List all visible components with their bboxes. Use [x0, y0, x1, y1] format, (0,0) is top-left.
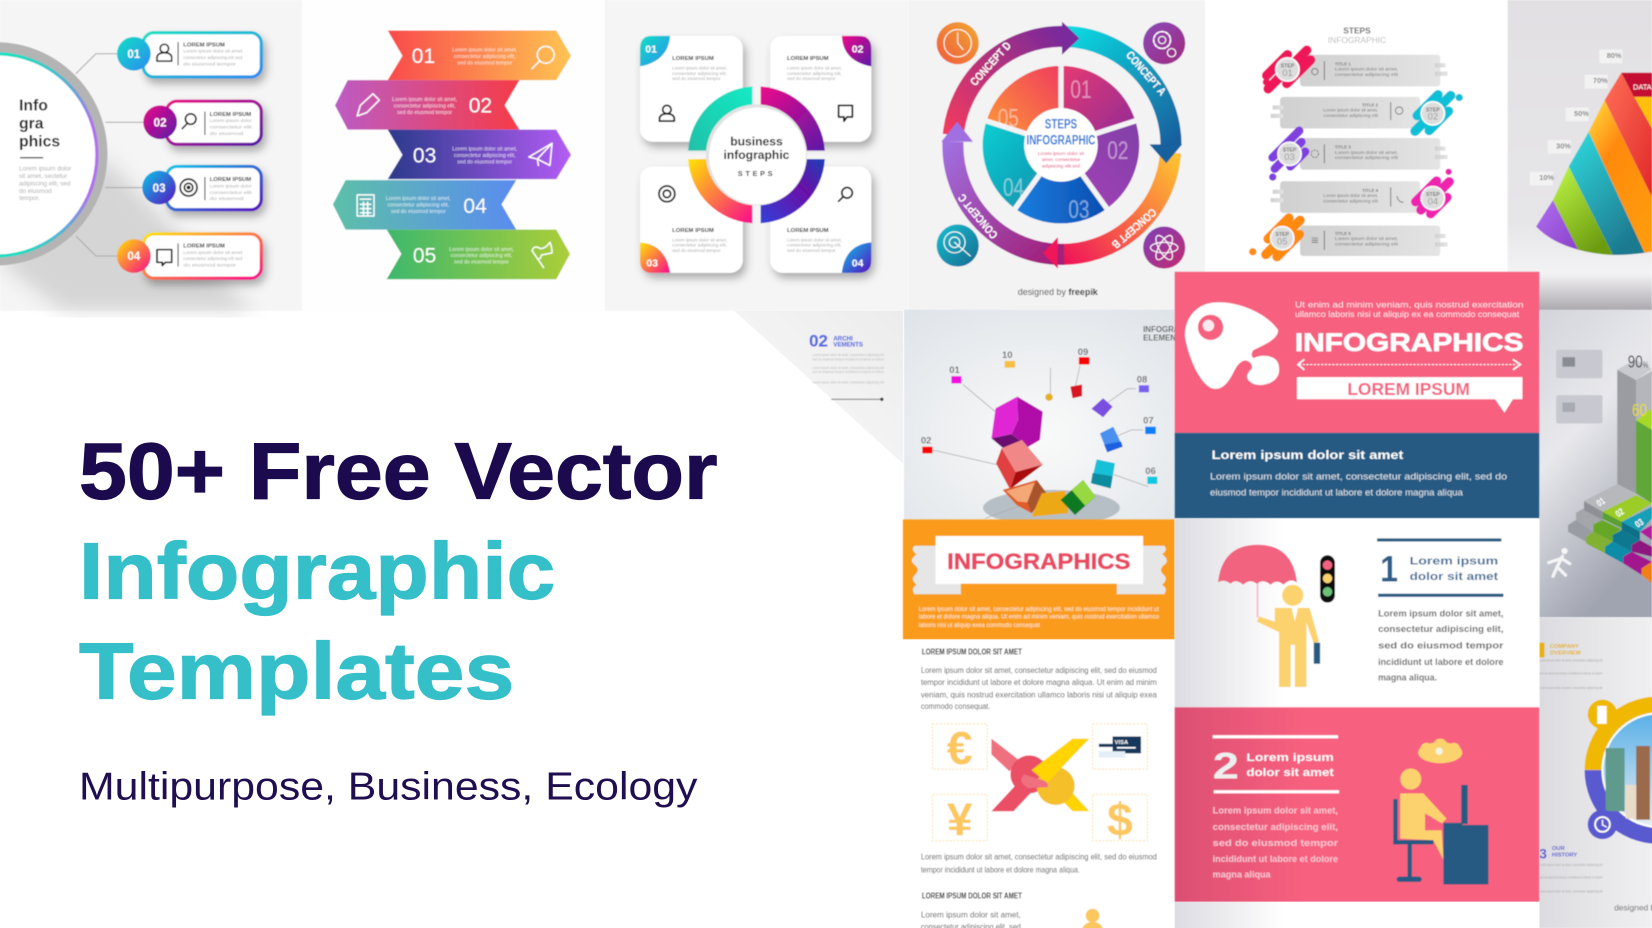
heading: company overview: [1539, 643, 1581, 657]
panel: circle infographic with four steps: [0, 0, 302, 311]
text block: our history: Lorem ipsum dolor sit amet, consectetur adipiscing elit: [1539, 863, 1602, 867]
icon: atom: [1143, 227, 1185, 269]
panel: business infographic steps: [605, 0, 908, 311]
footer strip under section 2: [1175, 902, 1539, 928]
card 02: [770, 36, 871, 142]
heading: Info gra phics: phics: [19, 133, 60, 150]
card: step 02: LOREM IPSUM: [210, 112, 251, 118]
heading: infographic elements: INFOGRAPHIC: [1143, 325, 1199, 334]
card 03: [640, 166, 743, 273]
text block: 02 archivements: [809, 332, 884, 401]
panel: circular concept diagram: [908, 0, 1205, 311]
card: step 03: Lorem ipsum dolor: [210, 184, 252, 190]
item labels: 02: [921, 436, 931, 447]
chevron 04: sed do eiusmod tempor: [391, 209, 446, 215]
heading: steps infographic: [1328, 26, 1386, 45]
percentage labels: 50%: [1574, 109, 1589, 118]
isometric steps: 02: [1613, 505, 1626, 519]
banner text: consectetur adipiscing elit: [1335, 72, 1399, 77]
ring segments: [688, 86, 825, 223]
text block: company overview: sed do eiusmod tempor incididunt ut labore et dolore: [1539, 671, 1602, 675]
chevron 04: Lorem ipsum dolor sit amet,: [386, 196, 451, 202]
text block: 02 archivements: VEMENTS: [833, 342, 863, 349]
text block: company overview: [1539, 659, 1602, 690]
text block: section 2 paragraph: incididunt ut labore et dolore: [1213, 854, 1338, 864]
icon: person partial: [1082, 909, 1103, 928]
chevron 01: [388, 31, 571, 80]
card: step 01: do eiusmod tempor: [183, 61, 236, 67]
heading: Info gra phics: Info: [19, 98, 48, 115]
percentage labels: 80%: [1607, 51, 1622, 60]
concept labels: CONCEPT A: [1123, 50, 1168, 99]
isometric steps: 03: [1633, 516, 1646, 530]
card: step 03: consectetur elit: [210, 190, 253, 196]
icon: target: [937, 224, 979, 267]
bar: grey column: [1617, 359, 1652, 495]
panel: steps infographic with splashes: [1205, 0, 1508, 311]
item labels: 10: [1002, 350, 1012, 361]
splash: step 05: [1249, 214, 1307, 261]
heading: section two: LOREM IPSUM DOLOR SIT AMET: [922, 892, 1022, 901]
chevron 05: Lorem ipsum dolor sit amet,: [449, 247, 514, 253]
text block: section one: Lorem ipsum dolor sit amet, consectetur adipiscing elit, sed do eiusmod: [921, 666, 1157, 675]
text block: section 2 paragraph: Lorem ipsum dolor sit amet,: [1213, 805, 1338, 815]
banner text: TITLE 2: [1362, 102, 1379, 107]
title: [79, 426, 717, 716]
text block: our history: Lorem ipsum dolor sit amet, consectetur adipiscing elit: [1539, 889, 1602, 893]
cube: orange base: [1003, 480, 1047, 513]
text block: our history: sed do eiusmod tempor incididunt ut labore et dolore: [1539, 876, 1602, 880]
card 02: 02: [852, 44, 864, 56]
banner text: Lorem ipsum dolor sit amet,: [1335, 67, 1398, 72]
text block: section 2 paragraph: [1213, 805, 1339, 880]
concept labels: [956, 40, 1168, 250]
card: step 03: [142, 166, 261, 210]
chevron 01: sed do eiusmod tempor: [457, 60, 512, 66]
text block: section one: commodo consequat.: [921, 702, 990, 711]
heading line 2: Infographic: [79, 526, 555, 615]
credit: designed by freepik: designed by freepik: [1018, 287, 1098, 297]
text block: section 1 paragraph: sed do eiusmod tempor: [1378, 640, 1504, 650]
panel: right company overview: [1539, 617, 1652, 928]
heading: number 2: dolor sit amet: [1246, 767, 1334, 779]
card: step 01: 01: [127, 49, 141, 61]
pie numbers: [998, 75, 1128, 224]
item labels: [921, 347, 1157, 484]
text block: circle caption: adipiscing elit, sed: [19, 180, 71, 187]
splash: step 04: 04: [1428, 196, 1438, 207]
panel: orange infographic header: labore et dolore magna aliqua. Ut enim ad minim veniam, quis nostrud exercitation ullamco: [919, 613, 1160, 620]
panel: right isometric bars: [1539, 310, 1652, 617]
heading: steps infographic: INFOGRAPHIC: [1328, 35, 1386, 45]
panel: orange infographic header: Lorem ipsum dolor sit amet, consectetur adipiscing elit, sed do eiusmod tempor incididunt ut: [919, 606, 1159, 613]
heading: number 2: Lorem ipsum: [1246, 752, 1334, 764]
chevron 05: sed do eiusmod tempor: [454, 259, 509, 265]
text block: section 1 paragraph: magna aliqua.: [1378, 673, 1437, 683]
chevron 03: Lorem ipsum dolor sit amet,: [452, 147, 517, 153]
card 03: consectetur adipiscing elit,: [672, 243, 727, 249]
text block: section one note: Lorem ipsum dolor sit amet, consectetur adipiscing elit, sed do eiusmod: [921, 853, 1157, 862]
text block: company overview: Lorem ipsum dolor sit amet, consectetur adipiscing elit: [1539, 686, 1602, 690]
chevron 05: [387, 230, 570, 279]
heading: our history: [1539, 846, 1577, 862]
card 02: LOREM IPSUM: [787, 56, 829, 62]
text block: header intro: [1295, 301, 1523, 319]
text block: our history: [1539, 863, 1602, 893]
centre label: Lorem ipsum dolor sit: [1038, 151, 1085, 157]
text block: section one: veniam, quis nostrud exercitation ullamco laboris nisi ut aliquip exea: [921, 690, 1157, 699]
card 01: [640, 36, 743, 142]
arrow: double headed: [1298, 359, 1520, 370]
chevron 03: [388, 130, 571, 179]
splash: step 02: STEP: [1426, 107, 1440, 113]
heading: number 1: 1: [1380, 549, 1398, 590]
card: step 04: Lorem ipsum dolor sit amet: [183, 250, 243, 256]
concept labels: CONCEPT C: [956, 191, 1001, 240]
banner text: TITLE 4: [1362, 188, 1379, 193]
text block: circle caption: [19, 166, 71, 202]
card 04: [770, 166, 871, 273]
info boxes: [1556, 350, 1602, 424]
chevron 03: consectetur adipiscing elit,: [454, 153, 515, 159]
card: step 02: [143, 101, 261, 144]
card: step 01: Lorem ipsum dolor sit amet: [183, 49, 243, 55]
card 02: consectetur adipiscing elit,: [787, 71, 842, 77]
icon: visa card: [1099, 736, 1141, 758]
cube: blue: [1100, 427, 1123, 452]
card: step 01: consectetur adipiscing elit sed: [183, 55, 243, 61]
text block: section one: tempor incididunt ut labore et dolore magna aliqua. Ut enim ad minim: [921, 678, 1157, 687]
chevron 01: consectetur adipiscing elit,: [454, 54, 515, 60]
card 01: LOREM IPSUM: [672, 56, 714, 62]
icon boxes: [932, 724, 1147, 841]
splash: step 03: [1268, 131, 1313, 181]
panel: blue band: Lorem ipsum dolor sit amet: [1212, 448, 1403, 462]
text block: section two: [921, 911, 1021, 928]
text block: section one: [921, 666, 1157, 711]
pie numbers: 03: [1068, 195, 1089, 224]
icon: visa card: VISA: [1115, 740, 1129, 746]
card 01: consectetur adipiscing elit,: [672, 71, 727, 77]
percentage labels: 10%: [1539, 173, 1554, 182]
icon: dollar: $: [1107, 793, 1133, 845]
item labels: 09: [1078, 347, 1088, 358]
icon: knot: [991, 739, 1089, 811]
panel: section 1: [1175, 518, 1539, 708]
card 01: sed do eiusmod tempor: [672, 76, 721, 82]
heading: our history: OUR: [1552, 846, 1566, 852]
text block: section one note: [921, 853, 1157, 874]
card: step 03: do eiusmod: [210, 196, 244, 202]
chevron 02: 02: [469, 95, 492, 118]
card: step 04: [117, 234, 261, 278]
bar: green column: [1636, 408, 1652, 503]
banner text: consectetur adipiscing elit: [1335, 155, 1399, 160]
panel: orange infographic header: INFOGRAPHICS: [947, 549, 1130, 574]
pie numbers: 02: [1107, 136, 1128, 165]
pie numbers: 05: [998, 104, 1019, 132]
splash: step 05: 05: [1277, 236, 1287, 247]
heading line 1: 50+ Free Vector: [79, 426, 717, 515]
splash: step 01: 01: [1282, 68, 1293, 79]
banner text: consectetur adipiscing elit: [1323, 198, 1379, 203]
icon: euro: €: [947, 722, 973, 774]
banner text: TITLE 1: [1335, 61, 1351, 66]
card: step 01: [117, 33, 261, 77]
ring with photo: [1585, 696, 1652, 844]
text block: section 2 paragraph: consectetur adipiscing elit,: [1213, 822, 1338, 832]
text block: 02 archivements: Lorem ipsum dolor sit amet, consectetur adipiscing elit: [812, 366, 884, 370]
card: step 02: do eiusmod: [210, 131, 244, 137]
chevron 04: [333, 180, 516, 230]
item labels: 01: [949, 365, 960, 376]
text block: section 2 paragraph: sed do eiusmod tempor: [1213, 838, 1339, 848]
pyramid bands: DATA: [1633, 83, 1652, 92]
cube: small red: [1070, 385, 1082, 398]
percentage labels: 70%: [1593, 76, 1608, 85]
banner text: Lorem ipsum dolor sit amet,: [1323, 108, 1378, 113]
callout: lorem ipsum: LOREM IPSUM: [1347, 379, 1470, 399]
heading: our history: 3: [1539, 847, 1547, 862]
text block: company overview: Lorem ipsum dolor sit amet, consectetur adipiscing elit: [1539, 659, 1602, 663]
icon: traffic light: [1320, 555, 1335, 603]
card: step 04: do eiusmod tempor: [183, 263, 236, 269]
heading: steps infographic: STEPS: [1343, 26, 1371, 36]
heading: section one: LOREM IPSUM DOLOR SIT AMET: [922, 647, 1022, 656]
centre label: adipiscing elit sed: [1042, 164, 1080, 170]
isometric steps: 01: [1594, 495, 1607, 509]
heading: number 1: dolor sit amet: [1410, 571, 1499, 583]
heading: infographics: INFOGRAPHICS: [1295, 329, 1523, 357]
text block: header intro: Ut enim ad minim veniam, quis nostrud exercitation: [1295, 301, 1523, 310]
heading: company overview: OVERVIEW: [1550, 650, 1581, 656]
splash: step 02: [1408, 89, 1463, 138]
card 04: sed do eiusmod tempor: [787, 248, 836, 254]
heading: number 2: [1213, 735, 1339, 793]
centre badge: [706, 104, 807, 205]
card 04: consectetur adipiscing elit,: [787, 243, 842, 249]
chevron 04: consectetur adipiscing elit,: [387, 203, 449, 209]
text block: section 1 paragraph: Lorem ipsum dolor sit amet,: [1378, 608, 1503, 618]
panel: orange infographic header: [903, 519, 1175, 640]
icon: running man: [1549, 548, 1570, 576]
card 01: 01: [645, 44, 657, 56]
heading line 3: Templates: [79, 627, 514, 716]
text block: 02 archivements: Lorem ipsum dolor sit amet, consectetur adipiscing elit: [812, 353, 884, 357]
chevron 01: Lorem ipsum dolor sit amet,: [452, 48, 517, 54]
heading: our history: HISTORY: [1552, 853, 1577, 859]
card 03: sed do eiusmod tempor: [672, 248, 721, 254]
card 02: Lorem ipsum dolor sit amet,: [787, 66, 842, 72]
card: step 04: consectetur adipiscing elit sed: [183, 256, 243, 262]
item labels: 07: [1143, 416, 1154, 427]
diagonal shadow behind title: [734, 311, 903, 464]
text block: section two: Lorem ipsum dolor sit amet,: [921, 911, 1021, 920]
banner text: consectetur adipiscing elit: [1335, 241, 1399, 246]
centre badge: infographic: [723, 148, 790, 162]
card: step 02: Lorem ipsum dolor: [210, 118, 252, 124]
text block: section 2 paragraph: magna aliqua: [1213, 870, 1272, 880]
text block: 02 archivements: ARCHI: [833, 335, 853, 342]
centre badge: business: [730, 134, 783, 148]
pie numbers: 01: [1070, 75, 1092, 104]
value labels: [1628, 353, 1649, 421]
concept labels: CONCEPT B: [1108, 205, 1158, 250]
banner text: Lorem ipsum dolor sit amet,: [1335, 236, 1398, 241]
banner text: TITLE 5: [1335, 231, 1351, 236]
chevron 02: consectetur adipiscing elit,: [394, 103, 455, 109]
chevron 05: consectetur adipiscing elit,: [451, 253, 512, 259]
badge: building: [1588, 700, 1617, 729]
panel: blue band: eiusmod tempor incididunt ut labore et dolore magna aliqua: [1210, 488, 1463, 498]
panel: blue band: Lorem ipsum dolor sit amet, consectetur adipiscing elit, sed do: [1210, 471, 1507, 481]
value labels: 90%: [1628, 353, 1649, 372]
text block: section one note: tempor incididunt ut labore et dolore magna aliqua.: [921, 865, 1080, 874]
banner dividers and icons: [1311, 61, 1403, 250]
cube: magenta: [991, 397, 1043, 455]
heading: infographic elements: [1143, 325, 1199, 342]
pie sectors: [980, 63, 1142, 226]
heading: company overview: COMPANY: [1550, 644, 1579, 650]
cube: green: [1061, 480, 1096, 515]
pyramid bands: [1536, 73, 1652, 255]
banner text: Lorem ipsum dolor sit amet,: [1335, 150, 1398, 155]
card 04: Lorem ipsum dolor sit amet,: [787, 237, 842, 243]
text block: circle caption: sit amet, sectetur: [19, 173, 67, 180]
text block: circle caption: Lorem ipsum dolor: [19, 166, 71, 173]
concept labels: CONCEPT D: [969, 40, 1014, 89]
card 03: Lorem ipsum dolor sit amet,: [672, 237, 727, 243]
panel: chevron steps: [302, 0, 605, 311]
chevron 03: 03: [413, 144, 436, 167]
chevron 05: 05: [413, 244, 436, 267]
cube: yellow base: [1032, 491, 1068, 517]
banner text: [1323, 61, 1399, 246]
heading: Info gra phics: [19, 98, 60, 158]
callout: lorem ipsum: [1297, 377, 1522, 413]
icon: person at desk: [1393, 739, 1488, 884]
banner text: Lorem ipsum dolor sit amet,: [1323, 193, 1378, 198]
splash: step 02: 02: [1428, 112, 1438, 123]
splash: step 01: STEP: [1281, 63, 1295, 69]
value labels: 60: [1632, 401, 1647, 421]
centre label: amet, consectetur: [1042, 157, 1081, 163]
card 03: LOREM IPSUM: [672, 228, 714, 234]
splash: step 05: STEP: [1275, 232, 1290, 238]
centre label: STEPS: [1045, 116, 1077, 132]
splash: step 04: STEP: [1426, 192, 1440, 198]
chevron 02: [335, 80, 519, 130]
chevron 01: 01: [412, 45, 435, 68]
heading: infographic elements: ELEMENTS: [1143, 333, 1186, 342]
panel: pink header: [1175, 272, 1539, 434]
text block: section 1 paragraph: consectetur adipiscing elit,: [1378, 624, 1503, 634]
text block: header intro: ullamco laboris nisi ut aliquip ex ea commodo consequat: [1295, 310, 1520, 319]
splash: step 01: [1261, 43, 1314, 96]
banner text: TITLE 3: [1335, 145, 1351, 150]
panel: currency infographic body: [903, 640, 1175, 928]
card 04: 04: [852, 258, 864, 270]
icon: clock: [937, 22, 979, 64]
chevron 02: sed do eiusmod tempor: [397, 110, 452, 116]
icon: palette puzzle: [1185, 302, 1279, 389]
icon: yen: ¥: [947, 793, 973, 845]
chevron 04: 04: [463, 195, 487, 218]
percentage labels: [1530, 50, 1622, 185]
chevron 03: sed do eiusmod tempor: [457, 159, 512, 165]
panel: orange infographic header: laboris nisi ut aliquip exea commodo consequat: [919, 622, 1040, 629]
isometric steps: [1568, 484, 1652, 583]
card: step 02: 02: [154, 117, 167, 129]
heading: number 2: 2: [1213, 746, 1239, 787]
panel: section 2: [1175, 707, 1539, 902]
card 02: sed do eiusmod tempor: [787, 76, 836, 82]
chevron 02: Lorem ipsum dolor sit amet,: [392, 97, 457, 103]
banner text: consectetur adipiscing elit: [1323, 113, 1379, 118]
text block: circle caption: do eiusmod: [19, 188, 52, 195]
text block: 02 archivements: sed do eiusmod tempor incididunt ut labore et dolore: [812, 370, 884, 374]
card: step 01: LOREM IPSUM: [183, 42, 225, 48]
leader lines: [932, 366, 1148, 518]
splash: step 04: [1414, 169, 1456, 217]
card 01: Lorem ipsum dolor sit amet,: [672, 66, 727, 72]
heading: number 1: Lorem ipsum: [1410, 556, 1498, 568]
icon: gear: [1143, 22, 1185, 64]
cube: small gold: [1045, 394, 1053, 401]
icon: man with umbrella: [1218, 545, 1320, 687]
splash: step 03: 03: [1284, 152, 1295, 163]
card: step 02: consectetur elit: [210, 125, 253, 131]
centre badge: STEPS: [738, 169, 775, 178]
cube: purple: [1092, 398, 1113, 417]
item labels: 06: [1145, 466, 1156, 477]
text block: section 1 paragraph: [1378, 608, 1504, 683]
panel: blue band: [1175, 433, 1539, 518]
text block: section 1 paragraph: incididunt ut labore et dolore: [1378, 657, 1503, 667]
outer arrow ring: [941, 22, 1182, 269]
subtitle: Multipurpose, Business, Ecology: [79, 766, 698, 809]
panel: colourful pyramid: [1508, 0, 1652, 311]
text block: 02 archivements: 02: [809, 332, 828, 351]
item labels: 08: [1137, 374, 1147, 385]
heading: Info gra phics: gra: [19, 116, 44, 133]
card 03: 03: [646, 258, 658, 270]
cube: cyan: [1091, 459, 1115, 488]
panel: 3D cubes infographic: [904, 310, 1199, 526]
card: step 04: LOREM IPSUM: [183, 244, 225, 250]
text block: 02 archivements: Lorem ipsum dolor sit amet, consectetur adipiscing elit: [812, 381, 884, 385]
heading: number 1: [1377, 538, 1503, 597]
card: step 04: 04: [127, 251, 141, 263]
step banners: [1271, 55, 1448, 256]
text block: circle caption: tempor.: [19, 195, 40, 202]
card: step 03: LOREM IPSUM: [210, 177, 251, 183]
percentage labels: 30%: [1556, 142, 1571, 151]
centre label: INFOGRAPHIC: [1026, 132, 1096, 148]
splash: step 03: STEP: [1283, 148, 1297, 154]
badge: history: [1588, 810, 1617, 839]
pie numbers: 04: [1003, 173, 1024, 202]
centre label: [1024, 108, 1098, 182]
card 04: LOREM IPSUM: [787, 228, 829, 234]
card: step 03: 03: [153, 183, 166, 195]
text block: 02 archivements: sed do eiusmod tempor incididunt ut labore et dolore: [812, 357, 884, 361]
cube: red: [996, 440, 1043, 489]
